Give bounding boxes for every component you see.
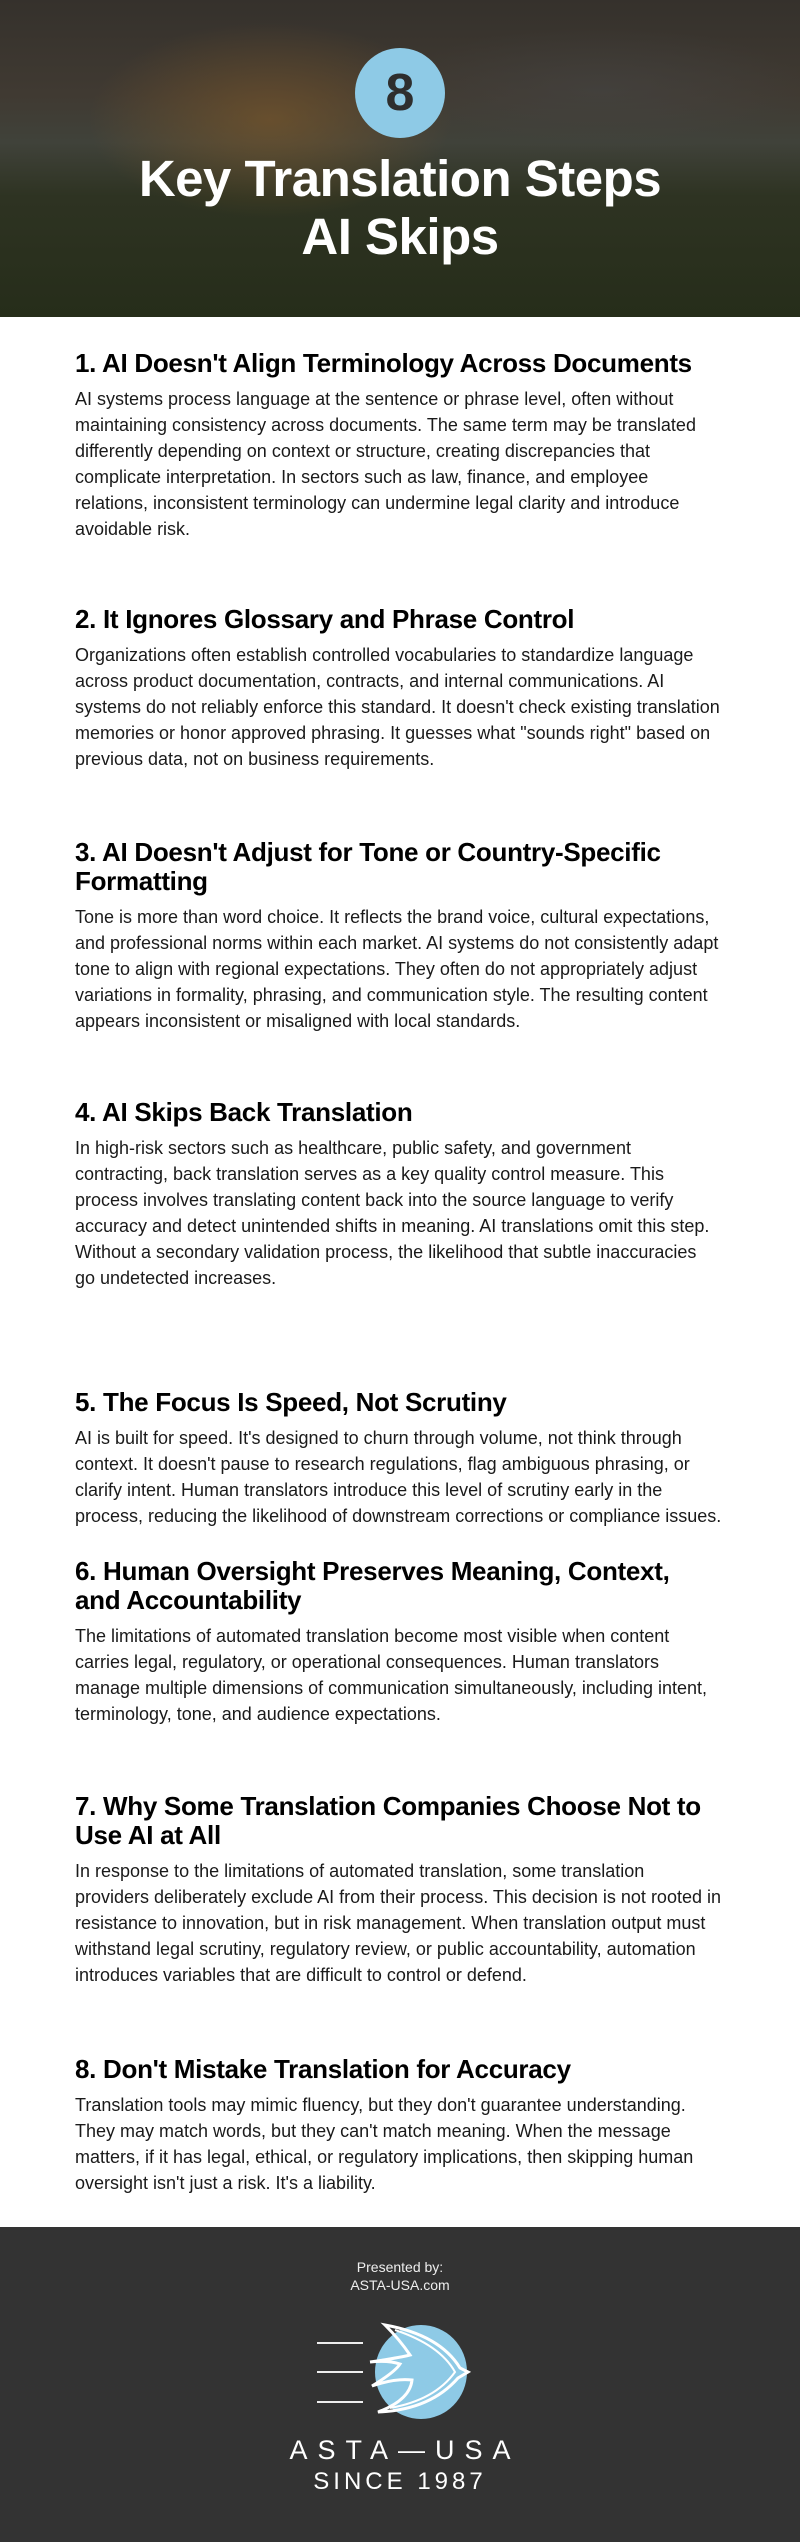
- title: AI Skips: [301, 208, 499, 265]
- section 7: Use AI at All: [75, 1820, 221, 1850]
- section 6: terminology, tone, and audience expectations.: [75, 1704, 441, 1724]
- since text: SINCE 1987: [313, 2468, 487, 2495]
- section 7: introduces variables that are difficult to control or defend.: [75, 1965, 527, 1985]
- presented by text: ASTA-USA.com: [350, 2277, 450, 2293]
- footer: [0, 2227, 800, 2542]
- section 6: carries legal, regulatory, or operational consequences. Human translators: [75, 1652, 659, 1672]
- presented by text: [350, 2259, 450, 2293]
- section 4: contracting, back translation serves as a key quality control measure. This: [75, 1164, 664, 1184]
- section 3: variations in formality, phrasing, and communication style. The resulting content: [75, 985, 708, 1005]
- section 4: go undetected increases.: [75, 1268, 276, 1288]
- section 1: maintaining consistency across documents. The same term may be translated: [75, 415, 696, 435]
- section 3: Tone is more than word choice. It reflects the brand voice, cultural expectations,: [75, 907, 709, 927]
- section 1: 1. AI Doesn't Align Terminology Across Documents: [75, 348, 692, 378]
- icon: logo bird: [317, 2322, 471, 2419]
- presented by text: Presented by:: [357, 2259, 443, 2275]
- section 2: previous data, not on business requirements.: [75, 749, 434, 769]
- section 1: differently depending on context or structure, creating discrepancies that: [75, 441, 650, 461]
- section 2: Organizations often establish controlled vocabularies to standardize language: [75, 645, 693, 665]
- section 3: [75, 837, 718, 1031]
- header: [0, 0, 800, 317]
- section 6: The limitations of automated translation become most visible when content: [75, 1626, 669, 1646]
- section 4: accuracy and detect unintended shifts in meaning. AI translations omit this step.: [75, 1216, 709, 1236]
- section 5: clarify intent. Human translators introduce this level of scrutiny early in the: [75, 1480, 662, 1500]
- section 8: 8. Don't Mistake Translation for Accuracy: [75, 2054, 571, 2084]
- section 1: relations, inconsistent terminology can undermine legal clarity and introduce: [75, 493, 679, 513]
- section 2: across product documentation, contracts, and internal communications. AI: [75, 671, 664, 691]
- title: [139, 150, 661, 265]
- section 4: Without a secondary validation process, the likelihood that subtle inaccuracies: [75, 1242, 696, 1262]
- section 7: In response to the limitations of automated translation, some translation: [75, 1861, 644, 1881]
- section 6: [75, 1556, 707, 1724]
- section 4: 4. AI Skips Back Translation: [75, 1097, 412, 1127]
- section 2: 2. It Ignores Glossary and Phrase Control: [75, 604, 574, 634]
- section 4: process involves translating content back into the source language to verify: [75, 1190, 673, 1210]
- section 6: and Accountability: [75, 1585, 301, 1615]
- section 4: In high-risk sectors such as healthcare, public safety, and government: [75, 1138, 631, 1158]
- section 7: resistance to innovation, but in risk management. When translation output must: [75, 1913, 705, 1933]
- section 7: [75, 1791, 721, 1985]
- section 8: oversight isn't just a risk. It's a liability.: [75, 2173, 376, 2193]
- section 1: avoidable risk.: [75, 519, 190, 539]
- badge: number 8: 8: [386, 64, 414, 122]
- section 2: systems do not reliably enforce this standard. It doesn't check existing translation: [75, 697, 720, 717]
- section 8: They may match words, but they can't match meaning. When the message: [75, 2121, 671, 2141]
- section 1: AI systems process language at the sentence or phrase level, often without: [75, 389, 673, 409]
- section 3: appears inconsistent or misaligned with local standards.: [75, 1011, 520, 1031]
- section 8: matters, if it has legal, ethical, or regulatory implications, then skipping human: [75, 2147, 693, 2167]
- section 8: Translation tools may mimic fluency, but they don't guarantee understanding.: [75, 2095, 686, 2115]
- section 1: complicate interpretation. In sectors such as law, finance, and employee: [75, 467, 648, 487]
- section 8: [75, 2054, 693, 2193]
- badge: number 8: [355, 48, 445, 138]
- section 5: process, reducing the likelihood of downstream corrections or compliance issues.: [75, 1506, 721, 1526]
- section 7: 7. Why Some Translation Companies Choose Not to: [75, 1791, 701, 1821]
- section 7: withstand legal scrutiny, regulatory review, or public accountability, automation: [75, 1939, 696, 1959]
- section 2: [75, 604, 720, 769]
- section 3: tone to align with regional expectations. They often do not appropriately adjust: [75, 959, 697, 979]
- section 1: [75, 348, 696, 539]
- section 2: memories or honor approved phrasing. It guesses what "sounds right" based on: [75, 723, 710, 743]
- section 6: 6. Human Oversight Preserves Meaning, Context,: [75, 1556, 670, 1586]
- section 6: manage multiple dimensions of communication simultaneously, including intent,: [75, 1678, 707, 1698]
- section 3: 3. AI Doesn't Adjust for Tone or Country-Specific: [75, 837, 661, 867]
- section 7: providers deliberately exclude AI from their process. This decision is not rooted in: [75, 1887, 721, 1907]
- section 3: Formatting: [75, 866, 208, 896]
- section 5: AI is built for speed. It's designed to churn through volume, not think through: [75, 1428, 682, 1448]
- section 5: [75, 1387, 721, 1526]
- section 5: context. It doesn't pause to research regulations, flag ambiguous phrasing, or: [75, 1454, 690, 1474]
- section 5: 5. The Focus Is Speed, Not Scrutiny: [75, 1387, 507, 1417]
- section 3: and professional norms within each market. AI systems do not consistently adapt: [75, 933, 718, 953]
- section 4: [75, 1097, 709, 1288]
- brand name: ASTA—USA: [289, 2435, 521, 2465]
- title: Key Translation Steps: [139, 150, 661, 207]
